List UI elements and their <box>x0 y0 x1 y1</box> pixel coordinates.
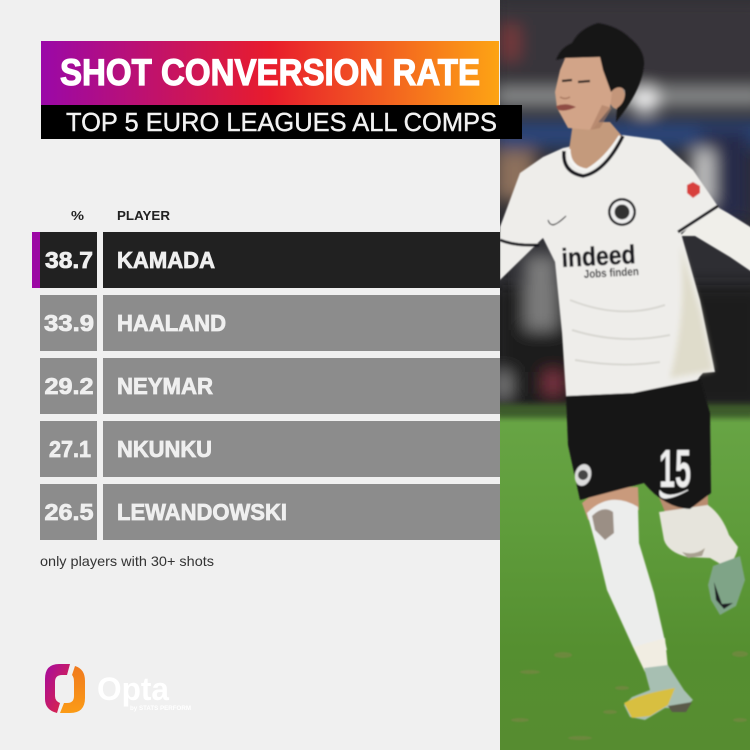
row: Nkunku: 27.1 <box>49 436 91 462</box>
shorts <box>566 378 711 509</box>
row: Haaland <box>40 295 500 351</box>
shirt swoosh <box>548 216 566 225</box>
row: Neymar: NEYMAR <box>117 373 213 399</box>
ankle tape <box>633 638 668 672</box>
sleeve stripes <box>500 206 718 245</box>
subtitle banner: TOP 5 EURO LEAGUES ALL COMPS <box>66 107 497 137</box>
ear <box>609 85 625 109</box>
shorts number 15: 15 <box>659 439 691 499</box>
highlight marker <box>32 232 40 288</box>
shorts badge <box>574 462 592 488</box>
row: Lewandowski <box>40 484 500 540</box>
footnote: only players with 30+ shots <box>40 553 214 569</box>
row: Haaland: HAALAND <box>117 310 226 336</box>
Opta logo: Opta <box>97 671 169 707</box>
title banner <box>41 41 499 105</box>
right leg skin <box>658 494 710 512</box>
row: Lewandowski: LEWANDOWSKI <box>117 499 287 525</box>
blurred stadium background <box>495 0 750 410</box>
row: Kamada: KAMADA <box>117 247 215 273</box>
row: Kamada <box>40 232 500 288</box>
shorts swoosh <box>660 490 688 498</box>
title banner: SHOT CONVERSION RATE <box>60 52 480 93</box>
shirt <box>500 135 719 396</box>
row: Neymar <box>40 358 500 414</box>
neck <box>569 122 622 170</box>
sleeve patch <box>687 182 700 198</box>
column heading: player: PLAYER <box>117 208 171 223</box>
right knee sock <box>659 505 738 566</box>
row: Neymar: 29.2 <box>44 373 94 399</box>
row: Kamada: 38.7 <box>45 247 93 273</box>
column heading: percent: % <box>71 208 84 223</box>
row: Nkunku: NKUNKU <box>117 436 212 462</box>
player figure: Jobs finden <box>584 266 639 281</box>
grass pitch <box>500 412 750 750</box>
collar <box>564 136 623 176</box>
club crest <box>608 198 636 226</box>
left boot <box>624 665 693 720</box>
sponsor: indeed <box>561 239 636 273</box>
photo: player celebrating in stadium <box>495 0 750 750</box>
right arm <box>680 204 750 272</box>
left sock <box>587 500 667 655</box>
row: Lewandowski: 26.5 <box>44 499 94 525</box>
Opta logo: by STATS PERFORM <box>130 706 191 712</box>
player figure <box>500 23 750 720</box>
hair <box>556 23 644 122</box>
row: Haaland: 33.9 <box>44 310 94 336</box>
row: Nkunku <box>40 421 500 477</box>
right boot <box>708 556 745 615</box>
Opta logo <box>45 664 191 713</box>
face <box>555 55 612 130</box>
left leg skin <box>582 487 639 520</box>
